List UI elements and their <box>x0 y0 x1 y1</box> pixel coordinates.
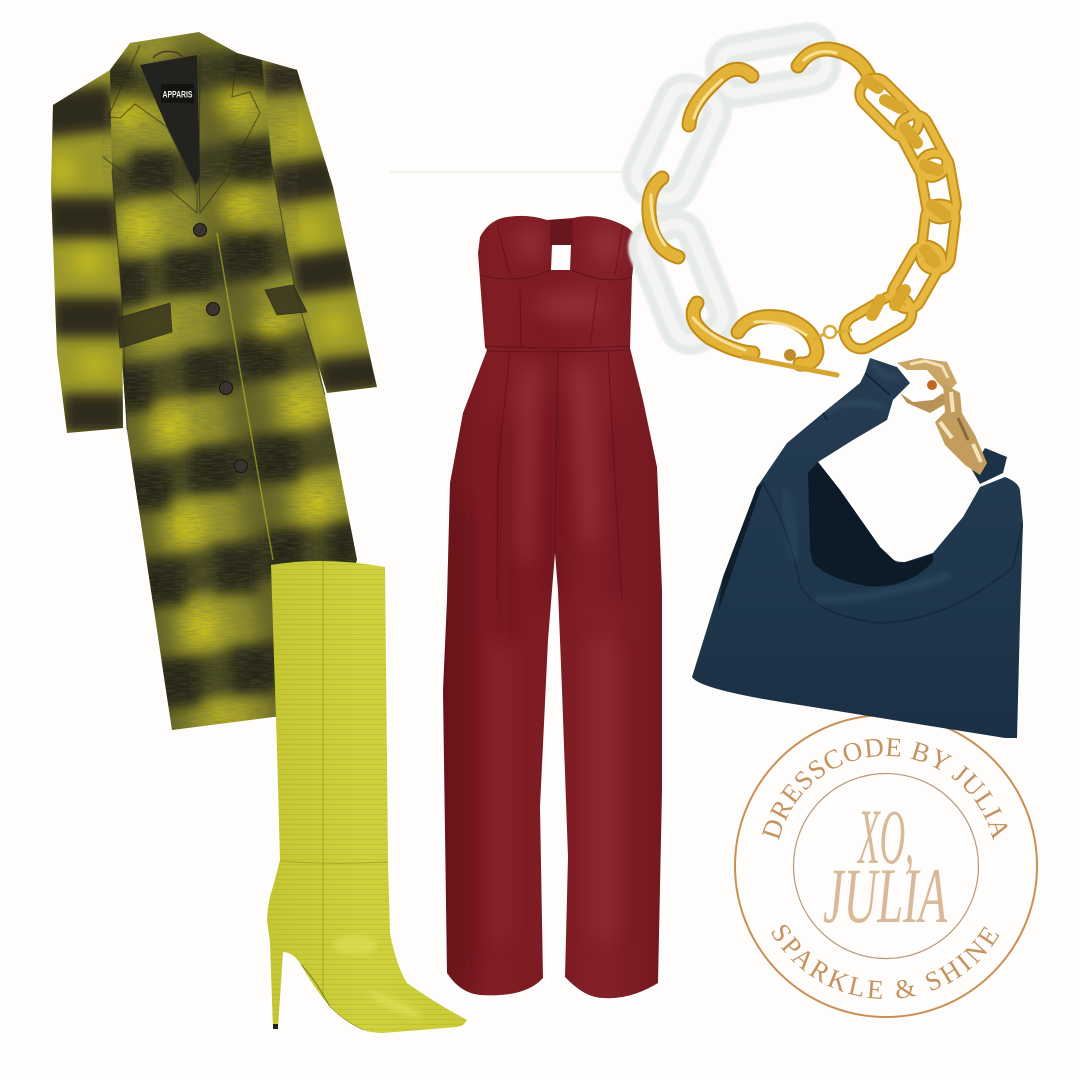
leather highlights and pleats <box>448 220 632 980</box>
right handle tab <box>972 448 1007 484</box>
round badge: Dresscode by Julia: XO, <box>857 793 914 880</box>
gold links over acrylic <box>649 49 868 364</box>
coat lining and label: APPARIS <box>162 90 192 100</box>
crystal and gold chain bracelet <box>631 34 959 375</box>
chunky gold chain handle <box>897 358 987 475</box>
buttons <box>194 224 248 472</box>
right sleeve <box>262 60 377 393</box>
boot texture and seams <box>260 555 475 1035</box>
burgundy leather jumpsuit <box>443 216 662 998</box>
clear acrylic links <box>631 34 829 346</box>
yellow lizard knee-high boot <box>260 555 475 1035</box>
left side shadow <box>718 483 763 612</box>
inner ring <box>794 774 978 958</box>
navy leather hobo bag <box>692 358 1023 738</box>
bag interior <box>808 462 933 586</box>
round badge: Dresscode by Julia <box>734 716 1038 1018</box>
signature Julia: JULIA <box>823 852 947 939</box>
plaid coat <box>51 32 377 730</box>
bodice cutout <box>551 245 571 270</box>
jumpsuit silhouette <box>443 216 662 998</box>
pockets <box>118 285 307 348</box>
boot shape <box>267 561 467 1033</box>
fold shading and handle knot <box>763 358 1023 623</box>
coat lining and label <box>140 51 200 185</box>
toggle clasp <box>743 326 852 375</box>
outer ring <box>735 715 1037 1017</box>
gold chain links <box>838 72 959 355</box>
bottom curved text: SPARKLE & SHINE <box>772 924 1000 999</box>
top curved text: DRESSCODE BY JULIA <box>762 738 1008 840</box>
left sleeve <box>51 70 123 433</box>
wool grain <box>100 33 356 728</box>
bag body <box>692 358 1023 738</box>
lapels and seams <box>103 45 325 560</box>
coat body <box>110 32 357 730</box>
elastic strap <box>550 220 573 245</box>
